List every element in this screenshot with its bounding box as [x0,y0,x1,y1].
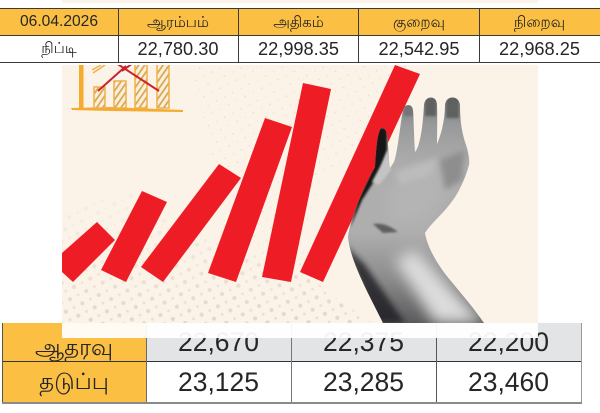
red bar 3 [141,164,241,282]
icon: small hand-drawn bar chart [71,62,183,112]
support value 2: 22,375 [323,327,404,357]
support value 1 [146,323,291,362]
illustration: falling red bars held by a hand [62,65,538,338]
row label: Nifty: நிப்டி [41,40,77,56]
open value: 22,780.30 [138,38,218,58]
header: close: நிறைவு [514,14,565,30]
dotted texture lower left [62,220,370,323]
high value: 22,998.35 [258,38,339,58]
top faded image sliver [62,0,538,3]
header: low: குறைவு [393,14,445,30]
support row label: ஆதரவு [35,334,113,360]
red bar 6 [300,65,420,282]
date cell: 06.04.2026 [20,12,98,30]
faded lower image strip [62,323,538,338]
red bar 2 [101,191,167,282]
resistance value 1: 23,125 [178,367,259,397]
support value 3: 22,200 [468,327,549,357]
header: open [118,8,238,35]
image background [62,65,538,323]
resistance value 3: 23,460 [468,367,549,397]
header: high: அதிகம் [273,14,324,30]
close value: 22,968.25 [499,38,580,58]
resistance value 2: 23,285 [323,367,404,397]
resistance row label [2,362,146,403]
support value 2 [291,323,436,362]
resistance row label: தடுப்பு [39,368,109,394]
support value 3 [436,323,581,362]
low value: 22,542.95 [379,38,459,58]
date cell [0,8,118,35]
red bar 4 [208,118,292,282]
top index table [0,8,600,63]
hand and forearm photo [345,97,484,323]
dotted texture upper middle [190,65,410,323]
bottom levels table: support and resistance [2,323,582,404]
header: low [359,8,479,35]
header: close [479,8,600,35]
support value 1: 22,670 [178,327,259,357]
header: open: ஆரம்பம் [147,14,209,30]
red bar 1 [62,222,115,282]
support row label [2,323,146,362]
header: high [238,8,359,35]
red bar 5 [262,83,331,282]
